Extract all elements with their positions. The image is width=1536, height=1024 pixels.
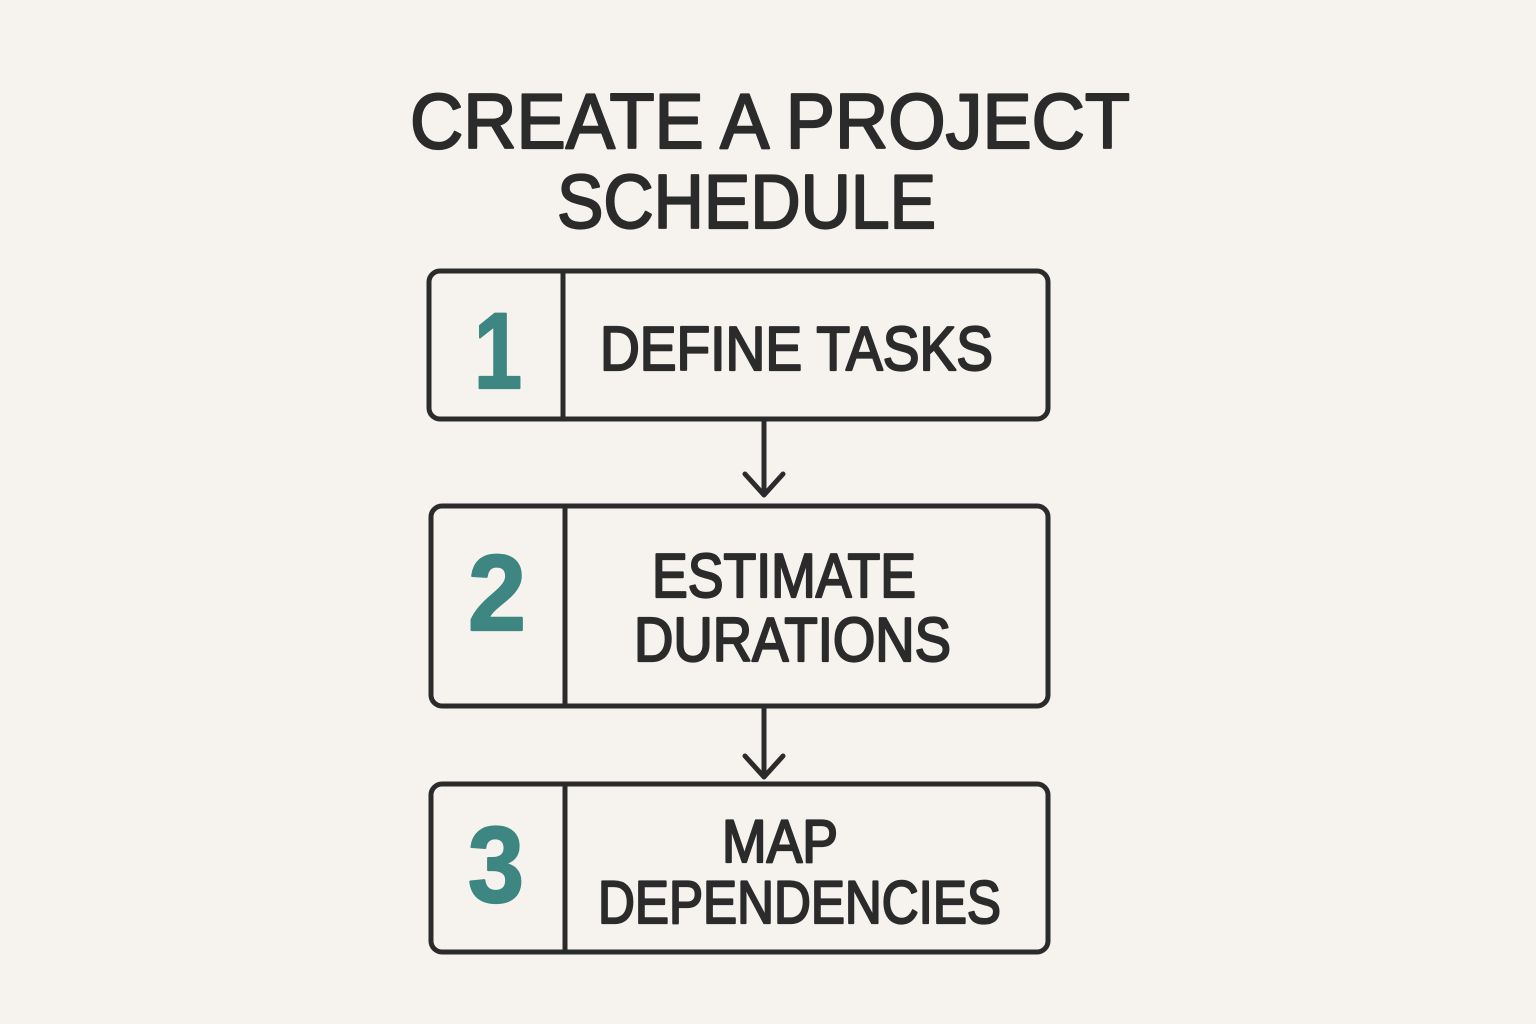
label: define tasks: DEFINE TASKS [600, 315, 993, 384]
panel: step 3 [431, 784, 1048, 952]
panel: step 2 [431, 506, 1048, 706]
label: estimate durations: ESTIMATE [652, 542, 916, 611]
number 1: 1 [474, 290, 522, 411]
label: map dependencies: MAP [722, 808, 838, 875]
arrow 1 [745, 421, 783, 495]
title: SCHEDULE [557, 160, 936, 245]
title [410, 77, 1130, 245]
number 2: 2 [468, 532, 526, 653]
panel: step 1 [429, 271, 1048, 419]
panel: step 2: DURATIONS [634, 606, 951, 675]
arrow 2 [745, 708, 783, 777]
panel: step 3: DEPENDENCIES [598, 869, 1001, 936]
title: CREATE A PROJECT [410, 77, 1130, 165]
number 3: 3 [468, 804, 524, 925]
